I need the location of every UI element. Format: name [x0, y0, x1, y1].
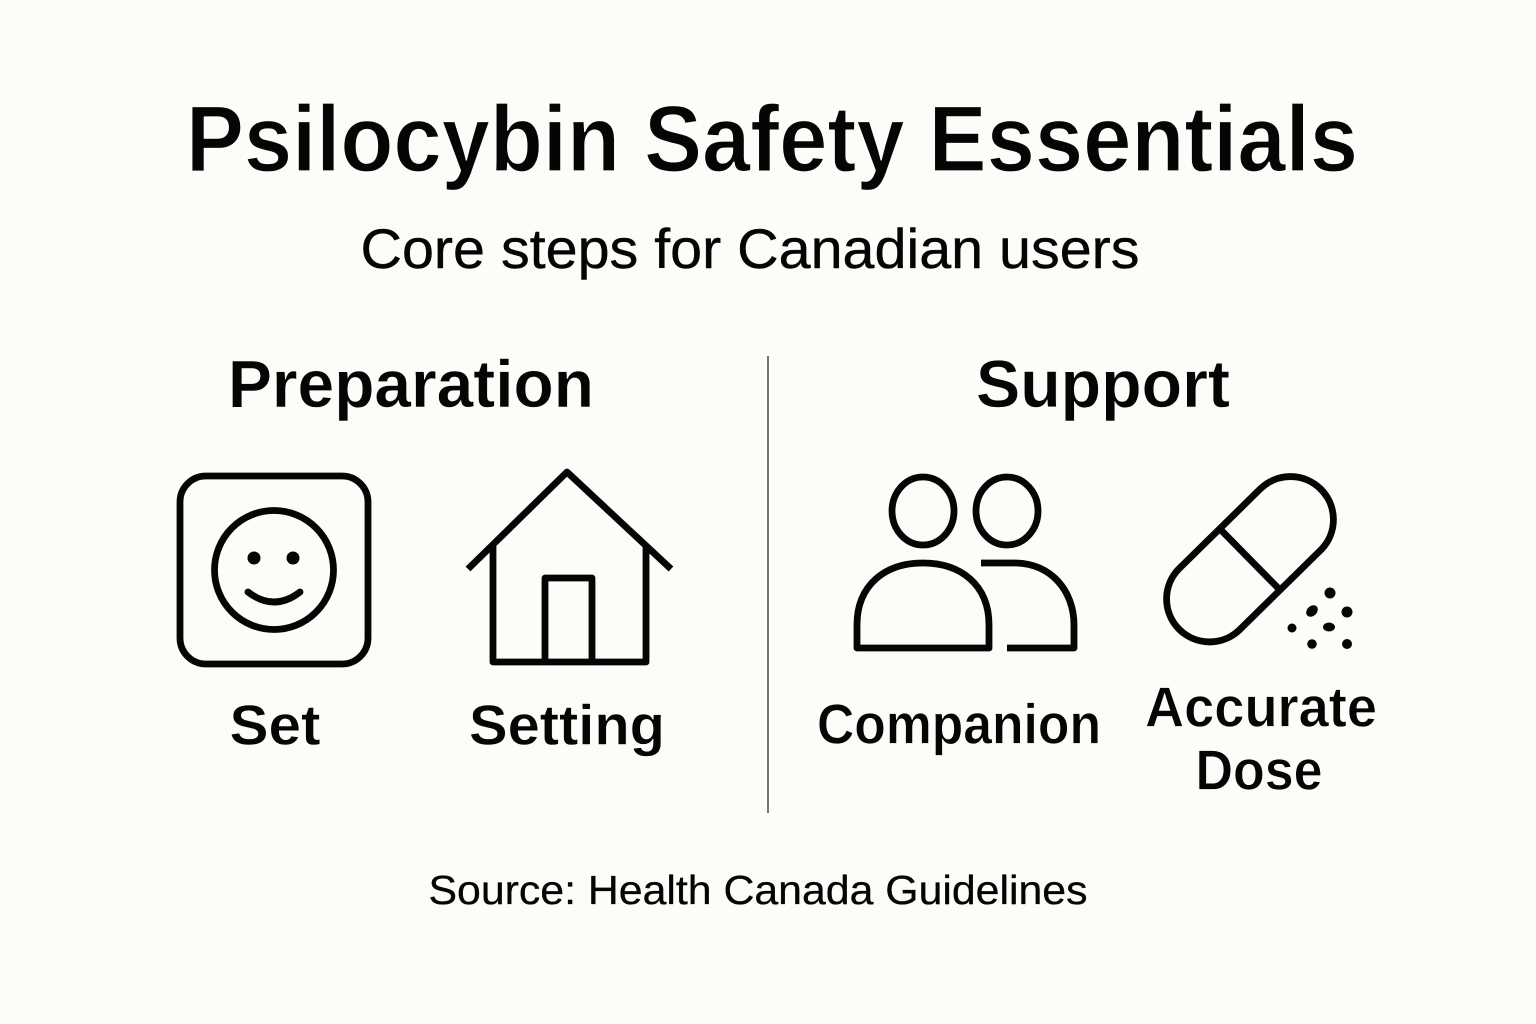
- heading: preparation: Preparation: [228, 347, 594, 422]
- vertical divider: [767, 356, 769, 813]
- icon: capsule with powder: [1167, 477, 1352, 649]
- subtitle: Core steps for Canadian users: [360, 217, 1140, 280]
- title: Psilocybin Safety Essentials: [186, 86, 1358, 191]
- label: accurate dose: Accurate: [1145, 676, 1377, 740]
- label: accurate dose: [1145, 676, 1377, 802]
- icon: house: [468, 472, 671, 662]
- icon: smiley face in rounded square: [180, 476, 368, 664]
- heading: support: Support: [976, 347, 1230, 422]
- label: companion: Companion: [817, 692, 1101, 756]
- label: setting: Setting: [469, 694, 665, 758]
- label: set: Set: [230, 694, 321, 758]
- icon: two people: [857, 477, 1074, 648]
- label: accurate dose: Dose: [1196, 738, 1322, 802]
- source note: Source: Health Canada Guidelines: [428, 867, 1088, 913]
